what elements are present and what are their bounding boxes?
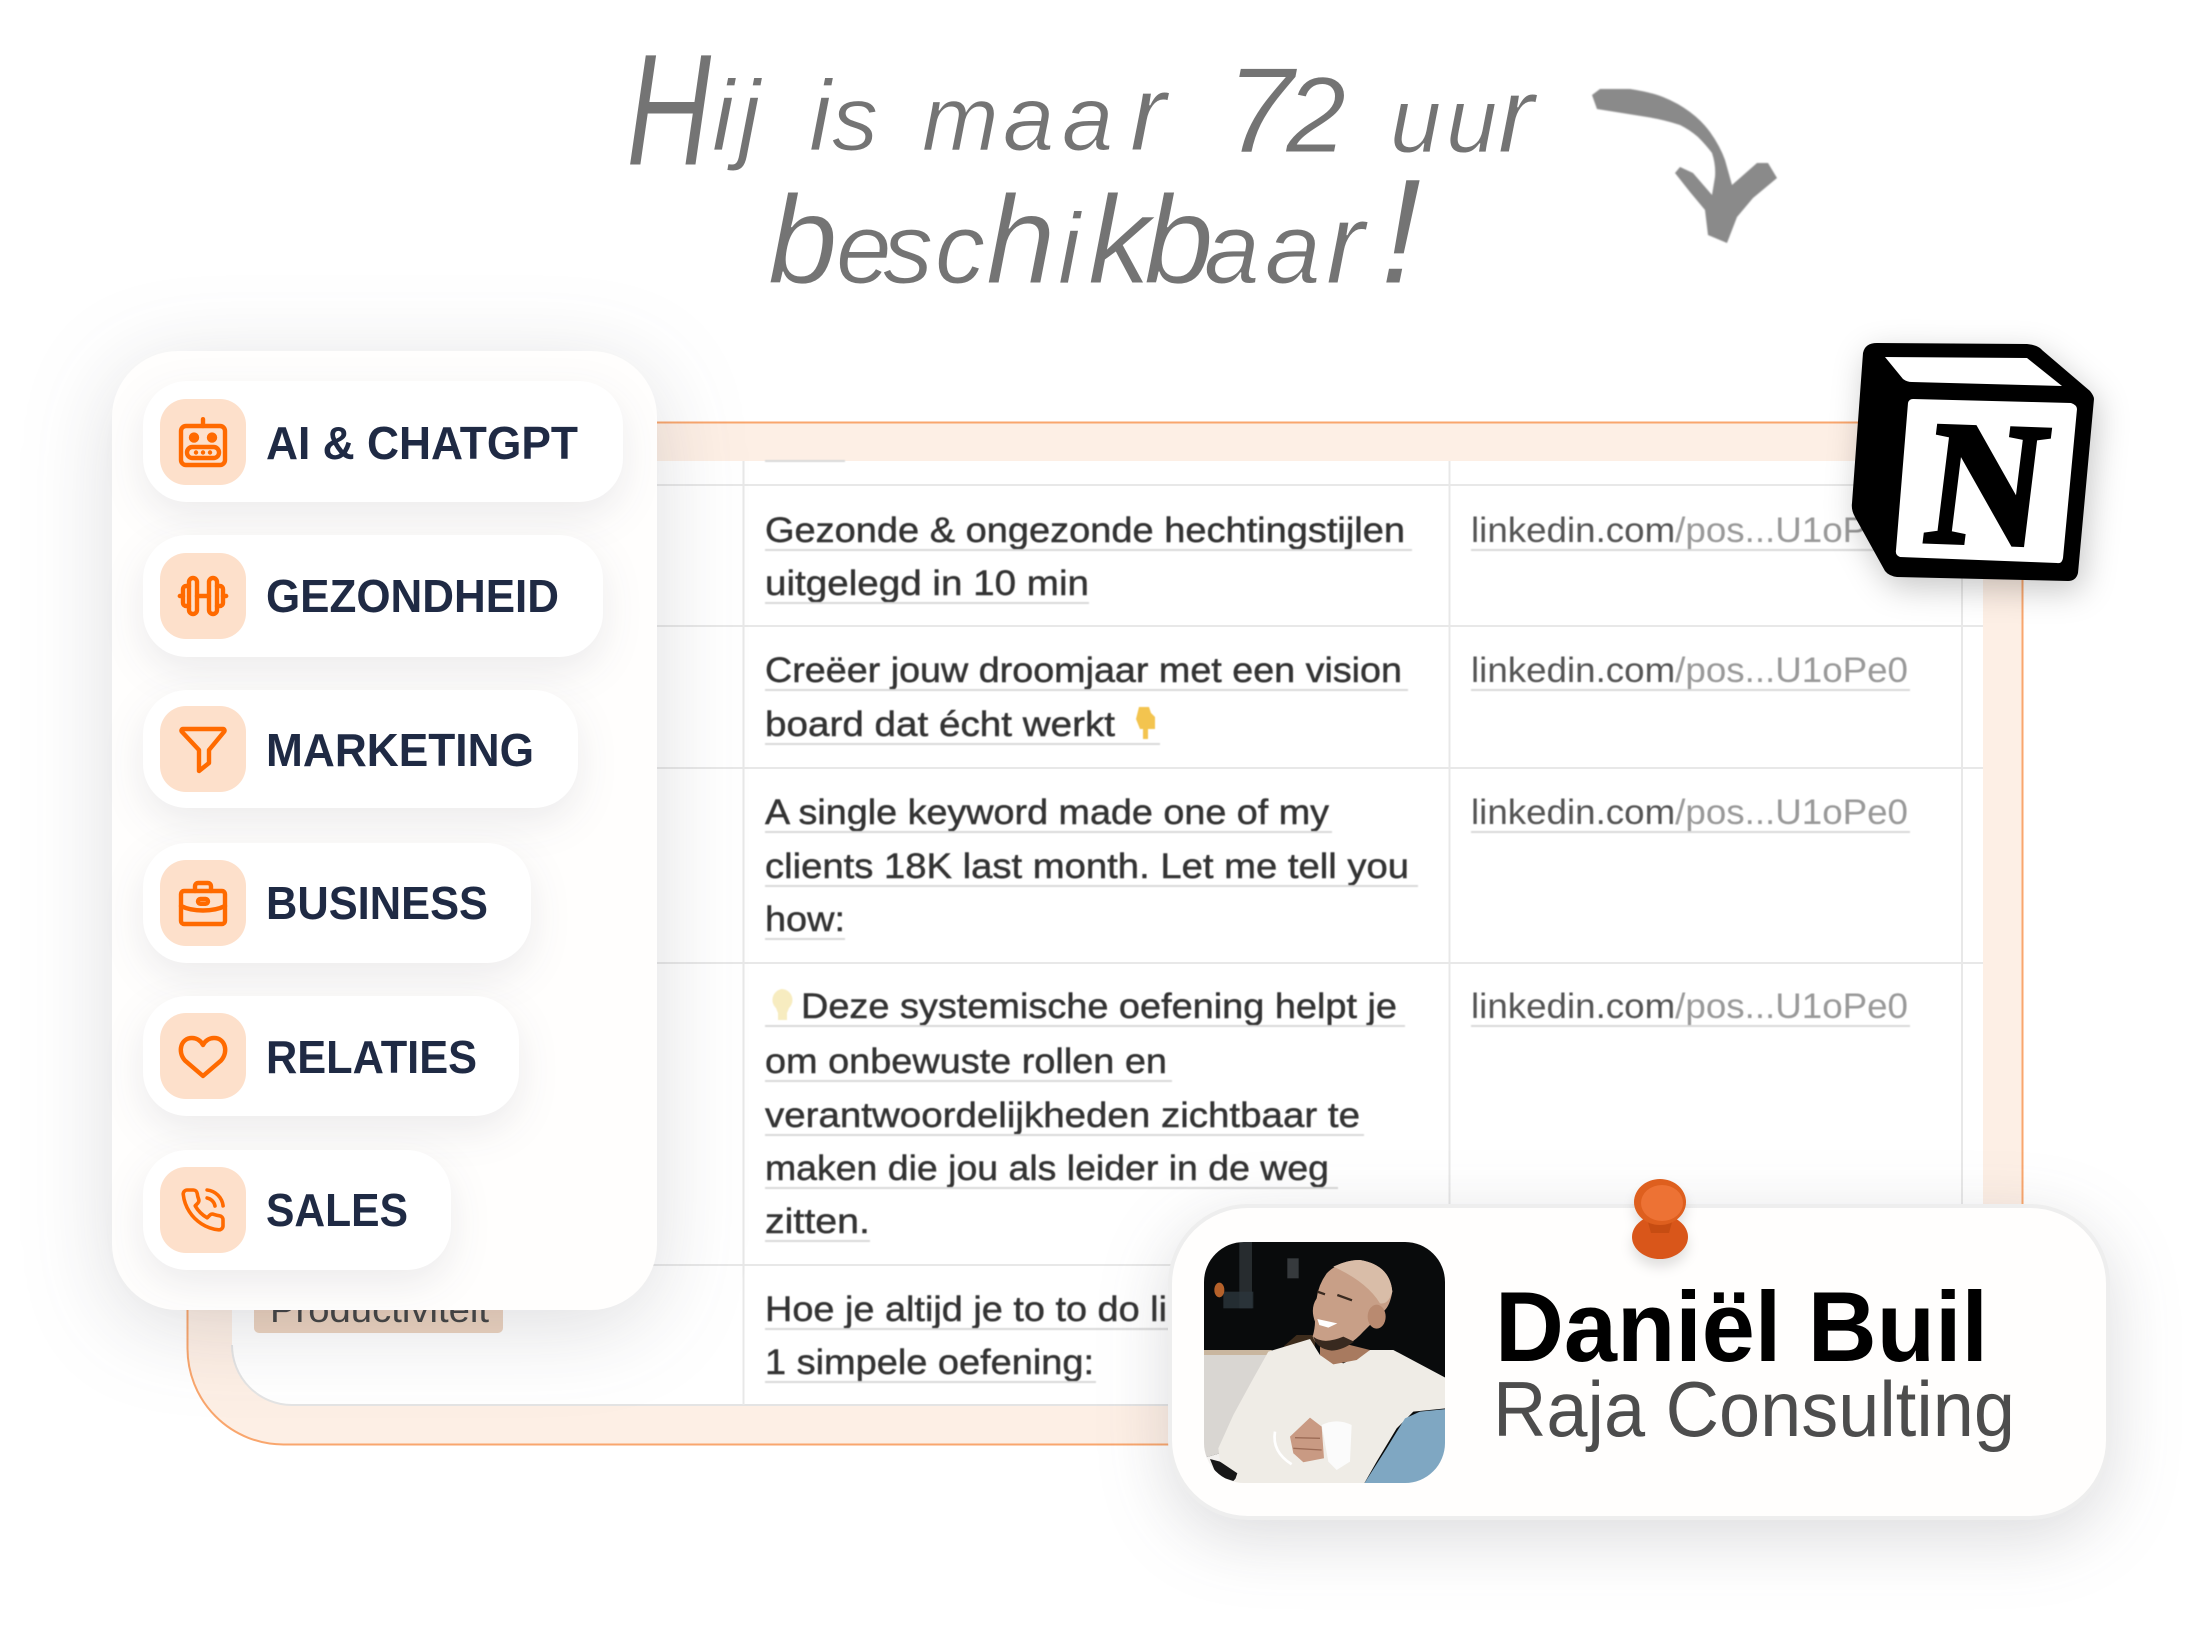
title: handwritten heading: i (809, 60, 834, 172)
icon: robot (181, 419, 225, 465)
photo: portrait illustration (1204, 1242, 1445, 1483)
title: handwritten heading: c (935, 193, 985, 305)
title: handwritten heading: b (1144, 171, 1214, 310)
category: AI & ChatGPT (143, 381, 623, 502)
title: handwritten heading: h (986, 171, 1056, 310)
category: Sales (143, 1150, 451, 1270)
title: handwritten heading: i (712, 60, 737, 172)
table link column: linkedin.com /pos...U1oPe0 (1471, 793, 1908, 832)
title: handwritten heading: b (768, 171, 838, 310)
table text column: post titles: zitten. (765, 1202, 870, 1241)
title: handwritten heading: H (626, 21, 712, 199)
title: handwritten heading: m (922, 68, 999, 170)
table text column: post titles: maken die jou als leider in de weg (765, 1149, 1329, 1188)
table link column: linkedin.com /pos...U1oPe0 (1471, 511, 1908, 550)
category: Relaties: RELATIES (266, 1031, 477, 1083)
title: handwritten heading: ! (1380, 147, 1422, 315)
arrow: brush stroke pointing down (1592, 89, 1777, 243)
name: Daniël Buil (1495, 1271, 1988, 1382)
table link column: linkedin.com /pos...U1oPe0 (1471, 651, 1908, 690)
title: handwritten heading: s (883, 193, 933, 305)
table text column: post titles: om onbewuste rollen en (765, 1042, 1167, 1081)
company: Raja Consulting (1493, 1365, 2015, 1453)
icon: funnel (181, 729, 225, 771)
title: handwritten heading: e (836, 193, 892, 305)
table text column: post titles: verantwoordelijkheden zichtbaar te (765, 1096, 1360, 1135)
title: handwritten heading: r (1130, 52, 1196, 173)
icon: briefcase (181, 883, 225, 924)
table text column: post titles: Gezonde & ongezonde hechtingstijlen (765, 511, 1405, 550)
table text column: post titles: how: (765, 900, 845, 939)
table text column: post titles: Deze systemische oefening helpt je (801, 987, 1397, 1026)
category: AI & ChatGPT: AI & CHATGPT (266, 417, 578, 469)
title: handwritten heading: r (1498, 54, 1538, 175)
table text column: post titles (765, 461, 1418, 1382)
title: handwritten heading: u (1390, 70, 1441, 172)
table link column: linkedin.com /pos...U1oPe0 (1471, 987, 1908, 1026)
table link column (1471, 511, 1910, 1026)
table text column: post titles: clients 18K last month. Let me tell you (765, 847, 1409, 886)
title: handwritten heading: r (1326, 180, 1369, 308)
title: handwritten heading: a (1062, 68, 1113, 170)
table text column: post titles: Hoe je altijd je to to do li (765, 1290, 1167, 1329)
title: handwritten heading (626, 21, 1538, 315)
title: handwritten heading: j (726, 60, 788, 172)
table text column: post titles: Creëer jouw droomjaar met een vision (765, 651, 1402, 690)
category: Marketing: MARKETING (266, 724, 534, 776)
title: handwritten heading: s (832, 68, 904, 170)
icon: pointing down emoji (1136, 707, 1155, 739)
category: Business: BUSINESS (266, 877, 488, 929)
title: handwritten heading: 2 (1285, 54, 1376, 175)
category: Gezondheid (143, 535, 603, 657)
panel: categories (112, 351, 657, 1310)
title: handwritten heading: a (1204, 193, 1260, 305)
table text column: post titles: A single keyword made one of my (765, 793, 1330, 832)
title: handwritten heading: a (1003, 68, 1054, 170)
icon: Notion logo: N (1917, 386, 2057, 584)
title: handwritten heading: k (1088, 171, 1156, 310)
title: handwritten heading: 7 (1226, 42, 1298, 178)
title: handwritten heading: a (1265, 193, 1321, 305)
table body (232, 461, 1983, 1405)
table text column: post titles: uitgelegd in 10 min (765, 564, 1089, 603)
category: Gezondheid: GEZONDHEID (266, 570, 559, 622)
table text column: post titles: 1 simpele oefening: (765, 1343, 1094, 1382)
table text column: post titles: board dat écht werkt (765, 705, 1115, 744)
category: Sales: SALES (266, 1184, 408, 1236)
icon: phone (183, 1190, 223, 1230)
category: Marketing (143, 690, 578, 808)
category: Business (143, 843, 531, 963)
icon: light bulb emoji (772, 989, 792, 1020)
card: profile (1170, 1206, 2108, 1518)
icon: push pin (1632, 1179, 1688, 1259)
category: Relaties (143, 996, 519, 1116)
title: handwritten heading: u (1446, 70, 1497, 172)
title: handwritten heading: i (1058, 193, 1083, 305)
tag: Productiviteit: Productiviteit (270, 1289, 489, 1330)
icon: heart (181, 1038, 225, 1076)
table frame: peach notion window (188, 422, 2022, 1444)
icon: dumbbell (180, 578, 226, 614)
icon: Notion logo (1852, 343, 2094, 584)
